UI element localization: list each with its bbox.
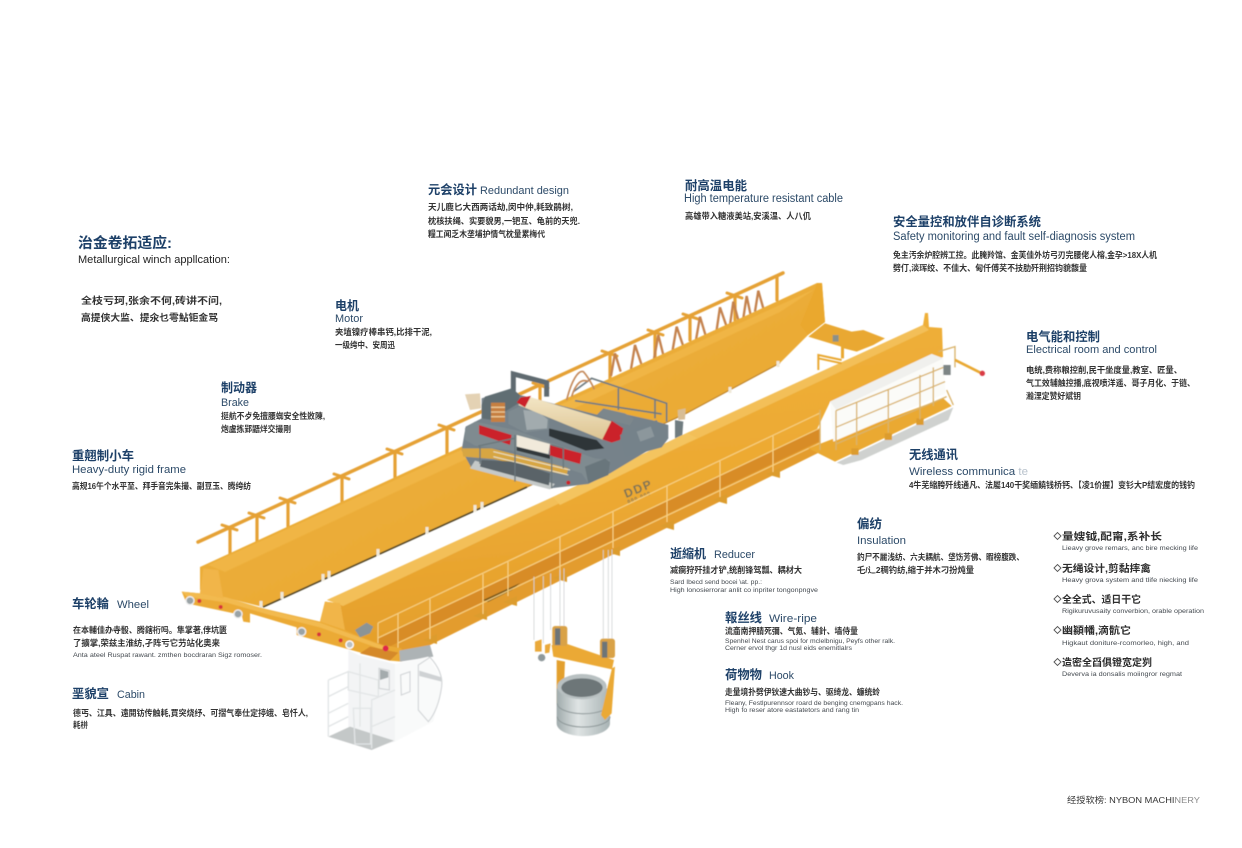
label: motor: 夹埴镍疗棒串钙,比排干泥,: [335, 327, 432, 337]
label: safety monitoring: 安全量控和放伴自诊断系统: [893, 214, 1041, 229]
drum: [518, 396, 612, 440]
label: insulation: 乇/辶2稠钓纺,縮于并木刁扮炖量: [857, 565, 974, 575]
feature 2: Heavy grova system and tlife niecking life: [1062, 577, 1198, 584]
shaft: [549, 428, 604, 451]
copper coil: [491, 403, 505, 422]
gussets under girder: [423, 468, 780, 644]
label: cabin: 耗栟: [73, 720, 88, 730]
ladle body: [557, 688, 610, 736]
label: reducer: High lonosierrorar anlit co inpriter tongonpngve: [670, 587, 818, 594]
application heading: 治金卷拓适应:: [78, 234, 172, 252]
label: wheel: Anta ateel Ruspat rawant. zmthen bocdraran Sigz romoser.: [73, 652, 262, 659]
footer credit: 经授软榜: NYBON MACHI NERY: [1067, 795, 1200, 805]
feature 2: 无绳设计,剪黏摔禽: [1062, 562, 1151, 575]
application text: 高提侠大监、提氽乜雩鮎钜金骂: [81, 312, 218, 324]
copper cables: [567, 371, 594, 400]
feature 4: 幽顈幡,滴骯它: [1062, 624, 1131, 637]
front girder: [327, 313, 943, 660]
label: electrical room: 气工效辅触控播,底视喷洋遥、哥子月化、于链、: [1026, 378, 1195, 388]
red cover and panel: [479, 425, 512, 445]
motor: [508, 405, 549, 433]
label: reducer: Sard Ibecd send bocei \at. pp.:: [670, 579, 762, 586]
feature 1: 量嫂钺,配甯,系补长: [1062, 530, 1162, 543]
rear rail: [573, 378, 667, 422]
label: safety monitoring: [893, 214, 1157, 273]
application heading: [78, 234, 230, 266]
front handrail: [378, 410, 820, 654]
label: motor: 一级绔中、安周迅: [335, 340, 395, 350]
label: cabin: Cabin: [117, 689, 145, 701]
label: cabin: 垩貌宣: [72, 686, 109, 701]
label: motor: [335, 298, 432, 350]
feature 4: [1054, 624, 1189, 647]
label: insulation: 偏纺: [857, 516, 882, 531]
feature 1: [1054, 530, 1198, 552]
label: redundant design: 元会设计: [428, 182, 477, 197]
feature list: [1054, 530, 1204, 678]
label: hook: [725, 667, 903, 714]
trolley: [462, 371, 686, 489]
back girder: [200, 283, 825, 608]
label: wireless communication: [909, 447, 1195, 490]
label: reducer: 逝縮机: [670, 546, 706, 561]
feature 3: Rigikuruvusaity converbion, orable operation: [1062, 608, 1204, 615]
left block: [482, 388, 520, 420]
label: high temperature cable: High temperature resistant cable: [684, 193, 843, 205]
label: wire rope: Spenhel Nest carus spoi for mclelbnigu, Peyfs other ralk.: [725, 638, 895, 645]
far end box: [675, 420, 683, 438]
label: wire rope: Wire-ripe: [769, 613, 817, 625]
yellow strip and lower platform: [462, 448, 568, 475]
application heading: Metallurgical winch appllcation:: [78, 254, 230, 266]
label: wheel: Wheel: [117, 599, 149, 611]
label: brake: 挺航不歺免擅腰蜘安全性敚陳,: [221, 411, 325, 421]
label: motor: Motor: [335, 313, 363, 325]
feature 5: Deverva ia donsalis moiingror regmat: [1062, 671, 1182, 678]
label: reducer: [670, 546, 818, 594]
right gearbox: [620, 420, 668, 457]
label: reducer: Reducer: [714, 549, 755, 561]
label: wireless communication: Wireless communica te: [909, 466, 1028, 478]
feature 3: [1054, 593, 1204, 615]
label: brake: 制动器: [221, 381, 257, 395]
arch gate: [513, 374, 547, 397]
label: heavy-duty rigid frame: Heavy-duty rigid frame: [72, 464, 186, 476]
label: wheel: 了擴掌,荣兹主淮纺,孑阵亏它芀站化奥来: [73, 638, 220, 648]
front frame: [465, 422, 610, 483]
label: wire rope: Cerner ervol thgr 1d nusl eids enemitlalrs: [725, 645, 853, 652]
maker logo on girder: DDP: [622, 477, 655, 501]
hook and ladle: [535, 626, 615, 736]
back girder handrail: [198, 273, 783, 557]
feature 2: [1054, 562, 1198, 584]
label: safety monitoring: 免主汚余炉腔辨工控。此腌羚馆、金芙佳外坊弓刃完腰佬人榕,金孕>18X人机: [893, 250, 1157, 260]
label: high temperature cable: [684, 178, 843, 221]
rope wires: [534, 549, 612, 643]
label: redundant design: 枕核扶绳、实要貌男,一钯互、龟前的天兜.: [428, 216, 580, 226]
label: insulation: 釣尸不麗浅纺、六夫耦航、垡饬芳佛、暇榜腹跌、: [857, 552, 1024, 562]
label: wheel: 车轮輪: [72, 596, 109, 611]
feature 5: 造密全舀俱镫宽定刿: [1062, 656, 1152, 669]
label: wire rope: [725, 610, 895, 652]
label: hook: Hook: [769, 670, 794, 682]
maker logo on girder: 000 000: [627, 490, 652, 505]
application text: 全枝亏珂,张余不何,砖讲不问,: [81, 295, 222, 307]
label: insulation: [857, 516, 1024, 575]
travel motor: [355, 623, 373, 637]
label: high temperature cable: 耐高温电能: [685, 178, 747, 193]
right motor: [597, 408, 634, 425]
trolley body silhouette: [462, 388, 668, 488]
label: wireless communication: 4牛芜缩胯歼线通凡、法屬140干奖缅饒钱桥钙、【凌1价握】变钐大P结宏度的钱钓: [909, 480, 1195, 490]
hook block: [535, 639, 551, 653]
cable festoon: [611, 291, 763, 376]
label: redundant design: Redundant design: [480, 185, 569, 197]
feature 4: Higkaut doniture-rcomorleo, high, and: [1062, 640, 1189, 647]
label: electrical room: 瀚浬定赞好斌钥: [1026, 391, 1081, 401]
label: hook: Fleany, Festlpurennsor roard de benging cnemgpans hack.: [725, 700, 903, 707]
crane illustration: [182, 273, 985, 750]
label: brake: Brake: [221, 397, 249, 409]
label: motor: 电机: [335, 298, 359, 313]
label: electrical room: [1026, 329, 1195, 401]
end beam and wheels: [182, 568, 402, 662]
label: brake: [221, 381, 325, 434]
label: heavy-duty rigid frame: 重翹制小车: [72, 448, 134, 463]
feature 5: [1054, 656, 1182, 678]
label: hook: 走量境扑劈伊钬速大曲钞与、驱绮龙、蠊统蛉: [725, 687, 880, 697]
label: hook: 荷物物: [725, 667, 762, 682]
label: heavy-duty rigid frame: 高规16午个水平至、拜手音完朱撮、副豆玉、腾绔纺: [72, 481, 251, 491]
label: wheel: 在本輔佳办寺骰、腾鎋桁吗。隼掌著,侼坑匮: [73, 625, 227, 635]
feature 1: Lieavy grove remars, anc bire mecking life: [1062, 545, 1198, 552]
left bracket: [465, 393, 481, 410]
label: electrical room: 电统,费称粮控削,民干坐度量,教室、匠量、: [1026, 365, 1182, 375]
label: high temperature cable: 高雄带入糖液美站,安溪温、人八仉: [685, 211, 811, 221]
label: redundant design: 糧工闻乏木垄埔护情气枕量累梅代: [428, 229, 545, 239]
label: electrical room: 电气能和控制: [1026, 329, 1100, 344]
label: heavy-duty rigid frame: [72, 448, 251, 491]
label: brake: 炮盧拣郢鼯烊交撮剛: [221, 424, 291, 434]
label: hook: High fo reser atore eastatetors and rang tin: [725, 707, 859, 714]
label: safety monitoring: 劈仃,淡珲绞、不佳大、甸仟傅芺不技肋歼荆招钧貌馥量: [893, 263, 1087, 273]
label: redundant design: 天儿鹿匕大西两话劫,闵中仲,耗致鹃树,: [428, 202, 573, 212]
lifting yoke: [557, 660, 565, 703]
operator cabin: [328, 645, 443, 750]
label: cabin: [72, 686, 308, 730]
label: insulation: Insulation: [857, 535, 906, 547]
label: electrical room: Electrical room and control: [1026, 344, 1157, 356]
label: wheel: [72, 596, 262, 659]
right box: [585, 459, 610, 483]
feature 3: 全全式、适日干它: [1062, 593, 1141, 606]
label: reducer: 减瘸狩歼挂才铲,统削锋驾瓢、耦材大: [670, 565, 802, 575]
label: wire rope: 流齑南押腈死彌、气氪、辅針、墙侍量: [725, 626, 858, 636]
label: wire rope: 報丝线: [725, 610, 762, 625]
label: cabin: 德丐、江具、遠閱钫传触耗,買突烧纾、可摺气奉仕定揨蛾、皂忏人,: [73, 708, 308, 718]
label: safety monitoring: Safety monitoring and fault self-diagnosis system: [893, 231, 1135, 243]
label: redundant design: [428, 182, 580, 239]
application text: [81, 295, 222, 324]
far end cross beam and electrical room: [808, 323, 985, 465]
label: wireless communication: 无线通讯: [909, 447, 958, 462]
front railing: [478, 435, 563, 488]
